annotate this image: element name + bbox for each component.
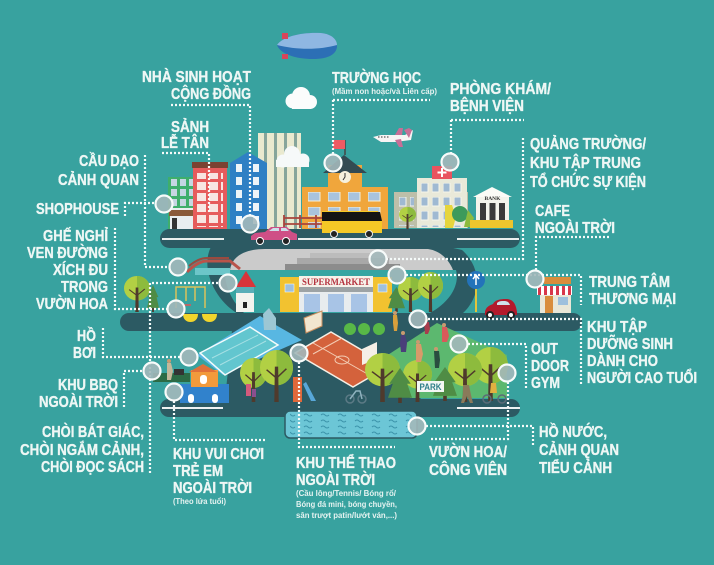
label: lake: CẢNH QUAN: [539, 442, 619, 459]
buildings: striped tower: [258, 133, 301, 229]
label: square: KHU TẬP TRUNG: [530, 154, 641, 172]
label: lobby: LỄ TÂN: [161, 134, 209, 152]
park sign: PARK: [420, 382, 442, 392]
label: flower garden: CÔNG VIÊN: [429, 461, 507, 479]
bridge: [187, 258, 240, 275]
label: clinic: BỆNH VIỆN: [450, 97, 524, 115]
label: benches and swings: TRONG: [61, 279, 108, 296]
swimming pool: [197, 308, 302, 375]
label: lake: TIỂU CẢNH: [539, 459, 612, 477]
lower road: [160, 399, 520, 417]
bank: BANK: [485, 196, 501, 202]
label: outdoor sports: sân trượt patin/lướt ván,...): [296, 510, 397, 520]
upper road: [160, 229, 520, 248]
label: outdoor sports: (Cầu lông/Tennis/ Bóng rổ/: [296, 488, 397, 498]
buildings: green shophouse: [168, 177, 199, 229]
label: benches and swings: XÍCH ĐU: [53, 262, 108, 279]
label: outdoor sports: KHU THỂ THAO: [296, 454, 396, 472]
sports court: [295, 332, 389, 387]
location markers: [144, 154, 544, 434]
label: children's play area: NGOÀI TRỜI: [173, 479, 252, 497]
label: children's play area: TRẺ EM: [173, 463, 223, 480]
bus: [322, 211, 382, 238]
car pink: [251, 227, 297, 244]
second hoop: [362, 342, 377, 365]
label: lobby: [161, 119, 209, 152]
trees by supermarket: [388, 272, 443, 312]
label: elderly exercise: DƯỠNG SINH: [587, 335, 673, 353]
label: shophouse: SHOPHOUSE: [36, 201, 119, 218]
coffee shop: [537, 277, 572, 313]
label: square: [530, 135, 647, 191]
small gate house: [236, 271, 256, 312]
lower road markings: [162, 407, 520, 409]
school: [302, 140, 388, 229]
label: children's play area: KHU VUI CHƠI: [173, 446, 264, 463]
label: BBQ: KHU BBQ: [58, 377, 118, 394]
road ring: [207, 245, 477, 314]
traffic sign: [467, 271, 485, 312]
people exercising: [393, 311, 449, 368]
plaza: [230, 249, 453, 270]
people BBQ: [153, 359, 190, 382]
walker and cyclist: [461, 383, 506, 403]
label: pavilions: CHÒI BÁT GIÁC,: [42, 423, 144, 441]
garden near bank: [445, 205, 474, 228]
central ground: [225, 330, 445, 400]
label: landscape walkway: [58, 153, 139, 189]
label: commercial center: THƯƠNG MẠI: [589, 291, 676, 308]
road network: [120, 229, 582, 417]
label: school: (Mầm non hoặc/và Liên cấp): [332, 86, 437, 96]
label: elderly exercise: DÀNH CHO: [587, 353, 658, 370]
label: square: TỔ CHỨC SỰ KIỆN: [530, 173, 646, 191]
label: outdoor cafe: [535, 203, 615, 237]
label: commercial center: TRUNG TÂM: [589, 273, 670, 291]
label: flower garden: [429, 443, 508, 479]
label: clinic: [450, 80, 552, 115]
label: outdoor cafe: NGOÀI TRỜI: [535, 219, 615, 237]
label: community house: [142, 69, 251, 103]
cloud over tower: [276, 146, 310, 168]
label: outdoor gym: OUT: [531, 341, 558, 358]
label: square: QUẢNG TRƯỜNG/: [530, 135, 647, 153]
label: benches and swings: VƯỜN HOA: [36, 295, 108, 313]
label: children's play area: (Theo lứa tuổi): [173, 496, 226, 506]
lake: [285, 411, 417, 438]
swings: [176, 287, 205, 308]
label: elderly exercise: KHU TẬP: [587, 318, 647, 336]
hospital: [394, 166, 468, 228]
leader lines: [103, 100, 609, 473]
supermarket: SUPERMARKET: [302, 277, 370, 287]
label: BBQ: [39, 377, 118, 411]
label: pavilions: CHÒI NGẮM CẢNH,: [20, 441, 144, 459]
label: benches and swings: VEN ĐƯỜNG: [27, 244, 108, 262]
illustration: [120, 33, 582, 438]
label: pool: BƠI: [73, 345, 96, 362]
upper road markings: [162, 238, 519, 240]
label: outdoor gym: GYM: [531, 375, 560, 392]
left tree and pine: [124, 276, 159, 312]
label: community house: CỘNG ĐỒNG: [171, 85, 251, 103]
park green: [380, 323, 507, 398]
label: benches and swings: [27, 228, 109, 313]
trees by pool: [240, 350, 293, 402]
buildings: red lobby tower: [192, 162, 228, 229]
bank: [470, 187, 513, 228]
park trees: [365, 347, 508, 403]
children: [246, 384, 256, 397]
label: outdoor sports: [296, 454, 397, 520]
label: children's play area: [173, 446, 264, 506]
fence: [284, 215, 322, 228]
buildings: blue tower: [230, 152, 267, 229]
label: lobby: SẢNH: [171, 119, 209, 136]
label: outdoor sports: NGOÀI TRỜI: [296, 471, 375, 489]
label: pavilions: CHÒI ĐỌC SÁCH: [41, 458, 144, 476]
label: landscape walkway: CẦU DẠO: [79, 153, 139, 170]
label: school: [332, 69, 437, 96]
label: BBQ: NGOÀI TRỜI: [39, 393, 118, 411]
label: outdoor cafe: CAFE: [535, 203, 570, 220]
label: pool: HỒ: [77, 327, 96, 345]
red car: [485, 299, 517, 318]
middle road: [120, 313, 582, 331]
label: community house: NHÀ SINH HOẠT: [142, 69, 251, 86]
cyclist: [346, 391, 366, 403]
label: school: TRƯỜNG HỌC: [332, 69, 421, 87]
pavilion castle: [180, 364, 229, 403]
label: landscape walkway: CẢNH QUAN: [58, 172, 139, 189]
ring interior: [225, 270, 457, 313]
label: benches and swings: GHẾ NGHỈ: [43, 228, 109, 245]
label: pavilions: [20, 423, 144, 476]
basketball hoop: [304, 311, 322, 333]
label: clinic: PHÒNG KHÁM/: [450, 80, 552, 98]
label: flower garden: VƯỜN HOA/: [429, 443, 508, 461]
label: outdoor sports: Bóng đá mini, bóng chuyền,: [296, 499, 397, 509]
plaza steps: [285, 253, 400, 270]
yellow benches: [183, 314, 217, 322]
bushes: [344, 323, 385, 335]
small tree near hospital: [399, 207, 416, 229]
label: elderly exercise: [587, 318, 697, 387]
icon: airship: [277, 33, 337, 59]
playground equipment: [293, 377, 316, 402]
supermarket: [280, 276, 392, 312]
label: outdoor gym: DOOR: [531, 358, 569, 375]
icon: cloud: [286, 87, 317, 109]
icon: plane: [373, 128, 413, 147]
label: outdoor gym: [531, 341, 569, 392]
label: lake: [539, 423, 619, 477]
label: lake: HỒ NƯỚC,: [539, 423, 607, 441]
label: pool: [73, 327, 96, 362]
label: commercial center: [589, 273, 676, 308]
